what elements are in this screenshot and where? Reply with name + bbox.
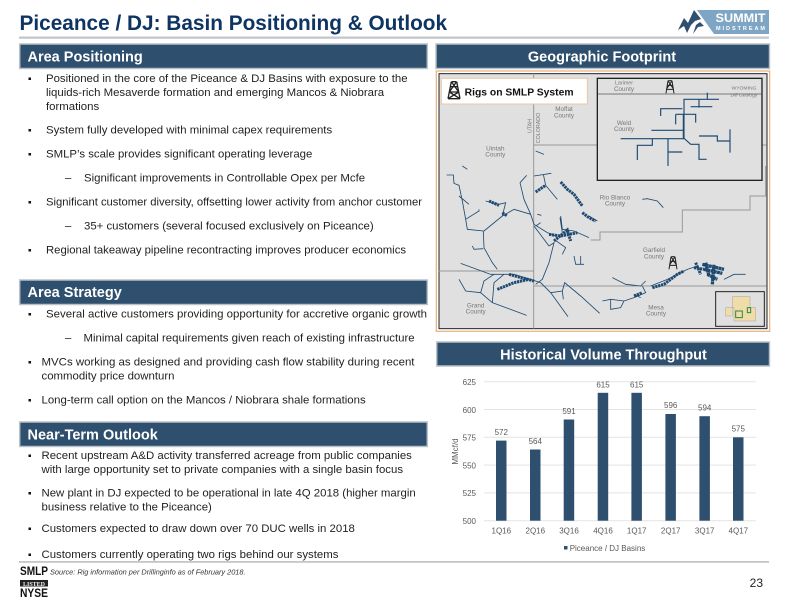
panel: geographic footprint: [436, 44, 770, 331]
panel: historical volume throughput: [437, 342, 770, 553]
county labels: County: [485, 151, 506, 158]
heading: near-term outlook: [20, 422, 427, 446]
map: [436, 71, 770, 331]
source note: Source: Rig information per Drillinginfo as of February 2018.: [50, 568, 246, 576]
county labels: [466, 106, 667, 318]
bullet list: near-term outlook: New plant in DJ expected to be operational in late 4Q 2018 (higher margin: [42, 488, 416, 500]
value labels: 615: [596, 380, 610, 390]
heading: near-term outlook: Near-Term Outlook: [28, 428, 159, 444]
county labels: COLORADO: [536, 113, 542, 143]
bullet list: area strategy: commodity price downturn: [42, 370, 174, 382]
value labels: 615: [630, 380, 644, 390]
value labels: 594: [698, 404, 712, 412]
category labels: 2Q16: [526, 526, 546, 536]
category labels: 3Q16: [559, 526, 579, 536]
logo: Summit Midstream: [678, 10, 769, 34]
bullet list: area positioning: SMLP’s scale provides significant operating leverage: [46, 148, 312, 160]
bar chart: 500: [463, 517, 477, 526]
inset map: DJ Basin: Dill Geology: [731, 92, 758, 98]
heading: geographic footprint: [436, 44, 770, 68]
icon: rig north: [666, 81, 674, 93]
bullet list: near-term outlook: Customers expected to draw down over 70 DUC wells in 2018: [42, 523, 355, 535]
page number: 23: [750, 576, 763, 590]
legend: rigs on SMLP system: Rigs on SMLP System: [465, 87, 574, 98]
category labels: 2Q17: [661, 526, 681, 536]
category labels: 3Q17: [695, 526, 715, 536]
value labels: 591: [562, 407, 576, 416]
bullet list: area positioning: Positioned in the core of the Piceance & DJ Basins with exposure to the: [46, 73, 408, 85]
county boundaries: [439, 74, 767, 329]
value labels: 564: [529, 437, 543, 446]
bullet list: area positioning: liquids-rich Mesaverde formation and emerging Mancos & Niobrara: [46, 87, 385, 99]
bullet list: area strategy: Long-term call option on the Mancos / Niobrara shale formations: [42, 394, 366, 406]
title rule: [19, 36, 769, 39]
inset map: DJ Basin: County: [614, 126, 635, 133]
heading: area positioning: [20, 44, 427, 68]
footer rule: [19, 561, 769, 563]
county labels: County: [554, 112, 575, 119]
icon: rig south: [669, 257, 677, 269]
heading: area strategy: Area Strategy: [28, 285, 122, 301]
bullet list: near-term outlook: Customers currently operating two rigs behind our systems: [42, 549, 339, 561]
icon: rig: [448, 82, 460, 99]
bars: [496, 393, 744, 521]
value labels: 596: [664, 401, 678, 410]
locator map: [716, 292, 764, 326]
bar chart: 575: [463, 434, 477, 443]
inset map: DJ Basin: Larimer: [615, 80, 633, 86]
bullet list: area positioning: System fully developed with minimal capex requirements: [46, 124, 332, 136]
bullet list: area positioning: –: [65, 220, 72, 232]
value labels: 575: [732, 424, 746, 434]
inset map: DJ Basin: County: [614, 86, 635, 93]
county labels: Mesa: [648, 305, 664, 312]
county labels: County: [605, 201, 626, 208]
bullet list: area positioning: –: [65, 172, 72, 184]
logo: SMLP listed NYSE: SMLP: [20, 566, 48, 578]
bullet list: near-term outlook: Recent upstream A&D activity transferred acreage from public companies: [42, 450, 412, 462]
bar chart: 550: [463, 461, 477, 470]
inset map: DJ Basin: [597, 78, 762, 180]
bar chart: MMcf/d: [451, 438, 460, 465]
heading: historical volume throughput: [437, 342, 770, 366]
bar chart: 600: [463, 406, 477, 415]
heading: area positioning: Area Positioning: [28, 50, 143, 66]
county labels: Rio Blanco: [600, 195, 631, 202]
heading: historical volume throughput: Historical Volume Throughput: [500, 348, 707, 364]
bullet list: area positioning: 35+ customers (several focused exclusively on Piceance): [84, 220, 374, 232]
county labels: Garfield: [643, 247, 666, 254]
panel: area strategy: [20, 280, 427, 406]
county labels: Uintah: [486, 145, 505, 152]
county labels: County: [466, 308, 487, 315]
bullet list: near-term outlook: with large opportunity set to private companies with a single basin focus: [40, 464, 403, 476]
county labels: UTAH: [527, 119, 533, 133]
bullet list: area positioning: Significant customer diversity, offsetting lower activity from anchor customer: [46, 196, 422, 208]
category labels: [492, 526, 749, 536]
logo: SMLP listed NYSE: NYSE: [20, 588, 48, 600]
inset map: DJ Basin: WYOMING: [732, 86, 757, 92]
category labels: 4Q17: [729, 526, 749, 536]
county labels: Moffat: [555, 106, 573, 113]
logo: SMLP listed NYSE: LISTED: [23, 582, 46, 588]
bullet list: area positioning: [28, 73, 422, 256]
county labels: County: [646, 311, 667, 318]
logo: Summit Midstream: SUMMIT: [716, 13, 766, 25]
category labels: 4Q16: [593, 526, 613, 536]
logo: SMLP listed NYSE: [20, 566, 48, 600]
bullet list: area positioning: Significant improvements in Controllable Opex per Mcfe: [84, 172, 365, 184]
heading: area strategy: [20, 280, 427, 304]
logo: Summit Midstream: MIDSTREAM: [716, 26, 765, 32]
heading: geographic footprint: Geographic Footprint: [528, 50, 676, 66]
panel: area positioning: [20, 44, 427, 256]
legend: rigs on SMLP system: [441, 78, 587, 104]
value labels: [495, 380, 746, 446]
category labels: 1Q17: [627, 526, 647, 536]
bullet list: area positioning: formations: [46, 101, 99, 113]
bar chart: 525: [463, 489, 477, 498]
bullet list: area strategy: [28, 308, 427, 406]
chart legend: Piceance / DJ Basins: [570, 544, 645, 553]
title: Piceance / DJ: Basin Positioning & Outlook: [20, 12, 447, 35]
bar chart: 625: [463, 378, 477, 387]
panel: near-term outlook: [20, 422, 427, 561]
pipeline network: Garfield / Mesa: [536, 151, 746, 309]
pipeline network: Piceance: [447, 166, 600, 317]
dense pipeline clusters: [489, 182, 596, 289]
county labels: Grand: [467, 302, 485, 309]
bullet list: area positioning: Regional takeaway pipeline recontracting improves producer economics: [46, 244, 406, 256]
category labels: 1Q16: [492, 526, 512, 536]
bullet list: area strategy: –: [65, 332, 72, 344]
bullet list: near-term outlook: business relative to the Piceance): [42, 502, 212, 514]
bullet list: area strategy: Several active customers providing opportunity for accretive organic growth: [46, 308, 427, 320]
bullet list: area strategy: MVCs working as designed and providing cash flow stability during recent: [42, 356, 415, 368]
inset map: DJ Basin: Weld: [617, 120, 632, 127]
bullet list: area strategy: Minimal capital requirements given reach of existing infrastructure: [84, 332, 415, 344]
county labels: County: [644, 253, 665, 260]
value labels: 572: [495, 428, 509, 437]
bar chart: [451, 378, 756, 553]
bullet list: near-term outlook: [28, 450, 416, 561]
